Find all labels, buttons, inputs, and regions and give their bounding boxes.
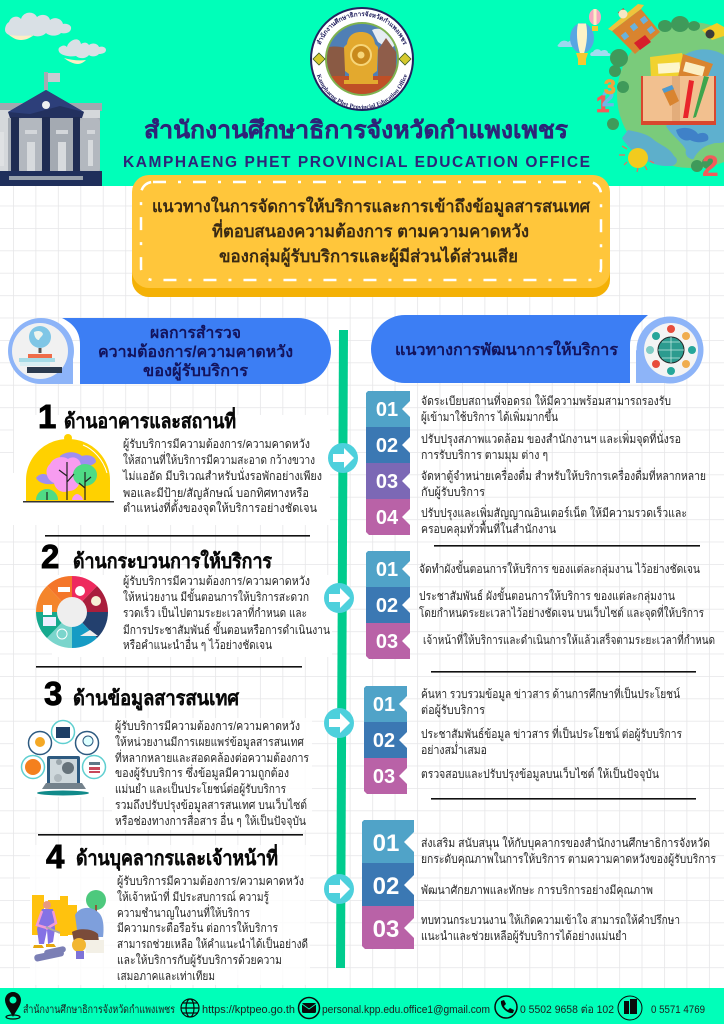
section 1: buildings and premises <box>23 398 322 516</box>
panel heading: survey results: ของผู้รับบริการ <box>143 362 248 382</box>
guideline list 3: ค้นหา รวบรวมข้อมูล ข่าวสาร ด้านการศึกษาที่เป็นประโยชน์ <box>421 685 680 702</box>
guideline list 3: 03 <box>373 766 395 788</box>
guideline list 3: ต่อผู้รับบริการ <box>421 703 485 718</box>
section 4: personnel: ให้เจ้าหน้าที่ มีประสบการณ์ ความรู้ <box>117 888 269 905</box>
icon: globe with school and book <box>558 4 724 183</box>
guideline list 3: อย่างสม่ำเสมอ <box>421 741 487 757</box>
icon: globe with school and book: 2 <box>702 150 719 183</box>
icon: arrow 1 <box>328 443 358 473</box>
guideline list 2: ประชาสัมพันธ์ ผังขั้นตอนการให้บริการ ของแต่ละกลุ่มงาน <box>419 587 675 604</box>
panel heading: service development guidelines <box>371 315 704 384</box>
section 2: service process: ผู้รับบริการมีความต้องการ/ความคาดหวัง <box>123 574 310 589</box>
icon: fax building <box>618 996 642 1020</box>
guideline list 1: ผู้เข้ามาใช้บริการ ได้เพิ่มมากขึ้น <box>421 408 558 425</box>
panel heading: service development guidelines: แนวทางการพัฒนาการให้บริการ <box>395 340 618 359</box>
icon: globe with school and book: 2 <box>602 86 614 111</box>
guideline list 3: 02 <box>373 730 395 752</box>
section 3: information: ผู้รับบริการมีความต้องการ/ความคาดหวัง <box>115 719 300 734</box>
section 1: buildings and premises: ไม่แออัด มีบริเวณสำหรับนั่งรอพักอย่างเพียง <box>122 467 322 483</box>
section 1: buildings and premises: ตำแหน่งที่ตั้งของจุดให้บริการอย่างชัดเจน <box>123 499 317 516</box>
guideline list 4: พัฒนาศักยภาพและทักษะ การบริการอย่างมีคุณภาพ <box>421 883 653 898</box>
icon: laptop with gears <box>22 720 106 796</box>
footer: contact bar: สำนักงานศึกษาธิการจังหวัดกำแพงเพชร <box>23 1004 175 1016</box>
guideline list 1: การรับบริการ ตามมุม ต่าง ๆ <box>421 448 548 463</box>
panel: guideline title banner <box>132 175 610 297</box>
icon: globe with school and book: 1 <box>596 91 609 118</box>
logo: provincial education office seal: สำนักงานศึกษาธิการจังหวัดกำแพงเพชร <box>316 11 407 44</box>
icon: arrow 3 <box>324 708 354 738</box>
section 4: personnel: มีความกระตือรือร้น ต่อการให้บริการ <box>117 921 278 935</box>
section 1: buildings and premises: ด้านอาคารและสถานที่ <box>64 406 236 433</box>
section 1: buildings and premises: 1 <box>38 398 56 435</box>
panel: guideline title banner: แนวทางในการจัดการให้บริการและการเข้าถึงข้อมูลสารสนเทศ <box>152 196 591 218</box>
section 4: personnel: สามารถช่วยเหลือ ให้คำแนะนำได้เป็นอย่างดี <box>117 936 308 951</box>
footer: contact bar: 0 5502 9658 ต่อ 102 <box>520 1004 614 1016</box>
section 4: personnel <box>32 838 308 983</box>
section 3: information: แม่นยำ และเป็นประโยชน์ต่อผู้รับบริการ <box>115 781 286 797</box>
guideline list 4: แนะนำและช่วยเหลือผู้รับบริการได้อย่างแม่นยำ <box>421 929 627 944</box>
section 2: service process <box>36 538 330 652</box>
icon: worker with animals <box>32 890 106 962</box>
section 2: service process: ด้านกระบวนการให้บริการ <box>73 549 272 573</box>
section 3: information <box>22 675 309 829</box>
logo: provincial education office seal: Kamphaeng Phet Provincial Education Office <box>316 74 407 109</box>
guideline list 2: 03 <box>376 631 398 653</box>
icon: mail <box>298 998 320 1018</box>
guideline list 1: จัดระเบียบสถานที่จอดรถ ให้มีความพร้อมสามารถรองรับ <box>421 392 671 408</box>
guideline list 4: ทบทวนกระบวนงาน ให้เกิดความเข้าใจ สามารถให้คำปรึกษา <box>421 913 680 927</box>
icon: arrow 2 <box>324 583 354 613</box>
panel: guideline title banner: ที่ตอบสนองความต้องการ ตามความคาดหวัง <box>212 219 529 241</box>
section 2: service process: มีการประชาสัมพันธ์ ขั้นตอนหรือการดำเนินงาน <box>123 621 330 637</box>
section 2: service process: 2 <box>41 538 59 575</box>
section 3: information: ของผู้รับบริการ ซึ่งข้อมูลมีความถูกต้อง <box>115 764 289 781</box>
section 3: information: ที่หลากหลายและสอดคล้องต่อความต้องการ <box>115 749 309 765</box>
panel heading: survey results <box>8 318 331 384</box>
guideline list 1: 01 <box>376 399 398 421</box>
icon: government building with clouds <box>0 13 106 186</box>
guideline list 2 <box>366 551 715 659</box>
icon: location pin <box>5 992 21 1019</box>
guideline list 4: 03 <box>373 916 399 943</box>
section 2: service process: หรือคำแนะนำอื่น ๆ ไว้อย่างชัดเจน <box>123 636 272 652</box>
timeline: central green bar <box>336 330 348 968</box>
title: Thai office name: สำนักงานศึกษาธิการจังหวัดกำแพงเพชร <box>144 117 568 144</box>
section 2: service process: รวดเร็ว เป็นไปตามระยะเวลาที่กำหนด และ <box>123 604 307 620</box>
icon: globe with school and book: 3 <box>604 76 616 99</box>
guideline list 3 <box>364 685 682 794</box>
section 4: personnel: ด้านบุคลากรและเจ้าหน้าที่ <box>76 843 278 871</box>
section 3: information: ให้หน่วยงานมีการเผยแพร่ข้อมูลสารสนเทศ <box>115 735 304 750</box>
section 1: buildings and premises: พอและมีป้าย/สัญลักษณ์ บอกทิศทางหรือ <box>123 486 309 500</box>
icon: phone <box>495 996 517 1018</box>
guideline list 1: ปรับปรุงและเพิ่มสัญญาณอินเตอร์เน็ต ให้มีความรวดเร็วและ <box>421 504 687 521</box>
icon: network globe <box>646 325 696 375</box>
section 1: buildings and premises: ผู้รับบริการมีความต้องการ/ความคาดหวัง <box>123 437 310 452</box>
section 1: buildings and premises: ให้สถานที่ให้บริการมีความสะอาด กว้างขวาง <box>123 451 315 467</box>
guideline list 1: 04 <box>376 507 399 529</box>
guideline list 3: ประชาสัมพันธ์ข้อมูล ข่าวสาร ที่เป็นประโยชน์ ต่อผู้รับบริการ <box>421 725 682 742</box>
icon: trees under dome <box>23 434 114 502</box>
panel heading: survey results: ผลการสำรวจ <box>150 324 241 342</box>
panel heading: survey results: ความต้องการ/ความคาดหวัง <box>98 343 293 361</box>
guideline list 1: 03 <box>376 471 398 493</box>
guideline list 3: ตรวจสอบและปรับปรุงข้อมูลบนเว็บไซต์ ให้เป็นปัจจุบัน <box>421 766 659 782</box>
section 3: information: รวมถึงปรับปรุงข้อมูลสารสนเทศ บนเว็บไซต์ <box>115 797 307 813</box>
footer: contact bar: 0 5571 4769 <box>651 1004 705 1016</box>
title: English office name: KAMPHAENG PHET PROVINCIAL EDUCATION OFFICE <box>123 154 590 171</box>
icon: segmented wheel <box>36 576 108 648</box>
guideline list 2: 01 <box>376 559 398 581</box>
guideline list 4: 01 <box>373 830 399 857</box>
icon: globe on books <box>19 326 62 373</box>
header background <box>0 0 724 186</box>
guideline list 1: ครอบคลุมทั่วพื้นที่ในสำนักงาน <box>421 520 556 537</box>
section 4: personnel: เสมอภาคและเท่าเทียม <box>117 969 215 983</box>
footer: contact bar <box>0 988 724 1024</box>
panel: guideline title banner: ของกลุ่มผู้รับบริการและผู้มีส่วนได้ส่วนเสีย <box>219 246 518 268</box>
section 4: personnel: และให้บริการกับผู้รับบริการด้วยความ <box>117 953 282 968</box>
section 3: information: 3 <box>44 675 62 712</box>
section 3: information: ด้านข้อมูลสารสนเทศ <box>73 687 240 712</box>
guideline list 4 <box>362 820 716 949</box>
guideline list 1: ปรับปรุงสภาพแวดล้อม ของสำนักงานฯ และเพิ่มจุดที่นั่งรอ <box>421 430 681 447</box>
guideline list 3: 01 <box>373 694 395 716</box>
icon: web globe <box>181 999 199 1017</box>
guideline list 4: 02 <box>373 873 399 900</box>
section 4: personnel: ผู้รับบริการมีความต้องการ/ความคาดหวัง <box>117 874 304 889</box>
footer: contact bar: personal.kpp.edu.office1@gmail.com <box>322 1004 490 1016</box>
section 4: personnel: 4 <box>46 838 65 875</box>
guideline list 1: กับผู้รับบริการ <box>421 485 485 500</box>
guideline list 2: 02 <box>376 595 398 617</box>
guideline list 1: 02 <box>376 435 398 457</box>
logo: provincial education office seal <box>310 7 414 111</box>
footer: contact bar: https://kptpeo.go.th <box>202 1004 295 1016</box>
section 2: service process: ให้หน่วยงาน มีขั้นตอนการให้บริการสะดวก <box>123 588 309 604</box>
icon: arrow 4 <box>324 874 354 904</box>
section 4: personnel: ความชำนาญในงานที่ให้บริการ <box>117 904 250 920</box>
guideline list 1 <box>366 391 706 537</box>
section 3: information: หรือช่องทางการสื่อสาร อื่น ๆ ให้เป็นปัจจุบัน <box>115 812 306 829</box>
